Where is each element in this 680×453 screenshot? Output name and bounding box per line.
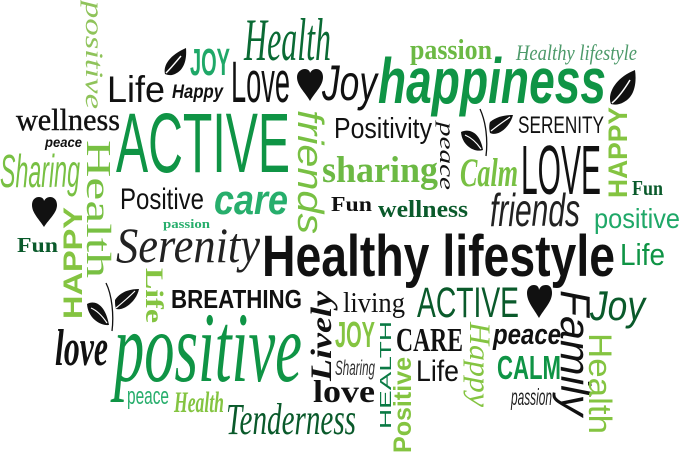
word: Life vertical: Life [140, 268, 167, 323]
icon: leaf [610, 70, 636, 105]
word: JOY teal: JOY [190, 42, 230, 84]
word: Life green: Life [620, 237, 665, 272]
word: peace teal: peace [127, 383, 169, 410]
word: JOY light: JOY [335, 314, 375, 355]
word: Health script: Health [243, 7, 331, 73]
word: wellness green: wellness [378, 197, 468, 223]
icon: heart [32, 197, 57, 227]
word: HAPPY right vertical: HAPPY [603, 107, 633, 198]
word: CALM: CALM [497, 349, 561, 386]
icon: leaves pair [461, 109, 513, 156]
word: Happy: Happy [172, 82, 224, 103]
word: Health light: Health [173, 386, 224, 419]
word: Lively vertical: Lively [305, 290, 338, 382]
word: positive rotated: positive [80, 0, 107, 109]
word: Sharing: Sharing [0, 145, 80, 197]
word: peace black: peace [492, 319, 561, 351]
word: Tenderness: Tenderness [226, 395, 356, 444]
word: Positive: Positive [120, 183, 204, 216]
word: peace: peace [44, 134, 82, 150]
word: Health vertical: Health [79, 140, 118, 279]
word: Serenity: Serenity [116, 217, 261, 273]
icon: heart [527, 285, 552, 318]
word: passion teal: passion [163, 216, 211, 231]
word: passion: passion [410, 35, 492, 66]
word: Joy: Joy [321, 55, 379, 111]
word: Life black: Life [416, 355, 459, 388]
word: sharing: sharing [322, 150, 438, 191]
word: Health right vertical: Health [582, 333, 618, 434]
icon: leaf [165, 48, 186, 75]
word: Life: Life [107, 69, 165, 110]
word: friends vertical: friends [290, 110, 331, 234]
word: ACTIVE: ACTIVE [116, 96, 290, 190]
word: living: living [343, 287, 405, 319]
word: passion thin: passion [510, 384, 552, 410]
word: SERENITY: SERENITY [518, 112, 604, 139]
word: positive large: positive [110, 292, 302, 403]
word: Calm: Calm [460, 150, 518, 195]
word: Fun black: Fun [331, 192, 372, 216]
word: BREATHING: BREATHING [171, 284, 302, 314]
word: Sharing thin: Sharing [335, 357, 375, 380]
word: love serif: love [313, 373, 375, 409]
word: Positive vertical: Positive [389, 357, 417, 453]
word: Joy dark green: Joy [589, 282, 648, 329]
word: friends: friends [490, 184, 580, 236]
word cloud: Love [231, 50, 290, 115]
word: Happy vertical: Happy [463, 321, 496, 408]
word: Healthy lifestyle script: Healthy lifestyle [515, 40, 637, 65]
word: Family vertical: Family [552, 290, 599, 419]
word: care: care [214, 176, 288, 223]
word: Positivity: Positivity [334, 113, 432, 145]
word: wellness: wellness [16, 102, 120, 137]
word: peace vertical: peace [435, 119, 459, 190]
word: CARE: CARE [396, 322, 463, 359]
word: Fun: Fun [17, 233, 58, 257]
word: HAPPY vertical: HAPPY [58, 207, 88, 319]
word: HEALTH vertical: HEALTH [378, 321, 395, 429]
icon: leaves pair [87, 283, 139, 331]
word: ACTIVE dark: ACTIVE [417, 279, 519, 327]
icon: heart [297, 69, 323, 101]
word: love: love [55, 320, 108, 377]
word: Fun right: Fun [632, 176, 663, 200]
